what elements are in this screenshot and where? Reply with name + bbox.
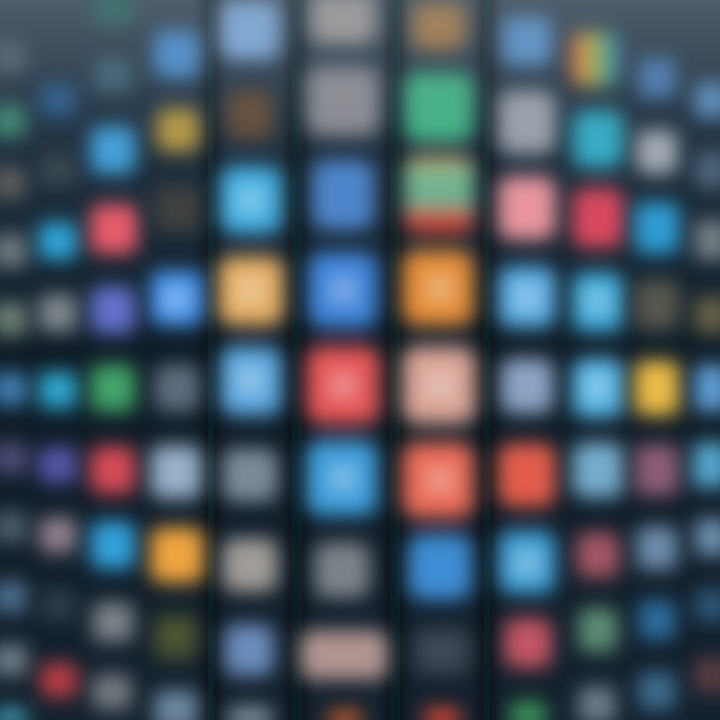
icon column 9 bbox=[570, 32, 624, 720]
icon column 2 bbox=[38, 84, 78, 697]
icon column 3 bbox=[90, 0, 138, 710]
icon highlights bbox=[162, 185, 610, 578]
icon column 5 bbox=[218, 0, 284, 720]
icon column 6 bbox=[300, 0, 388, 720]
icon column 8 bbox=[498, 16, 556, 720]
icon column 1 bbox=[0, 42, 28, 720]
dark gaps between columns bbox=[206, 0, 492, 720]
icon column 4 bbox=[150, 30, 204, 720]
icon column 10 bbox=[634, 58, 680, 710]
icon column 7 bbox=[402, 2, 476, 720]
icon column 11 bbox=[692, 82, 720, 692]
